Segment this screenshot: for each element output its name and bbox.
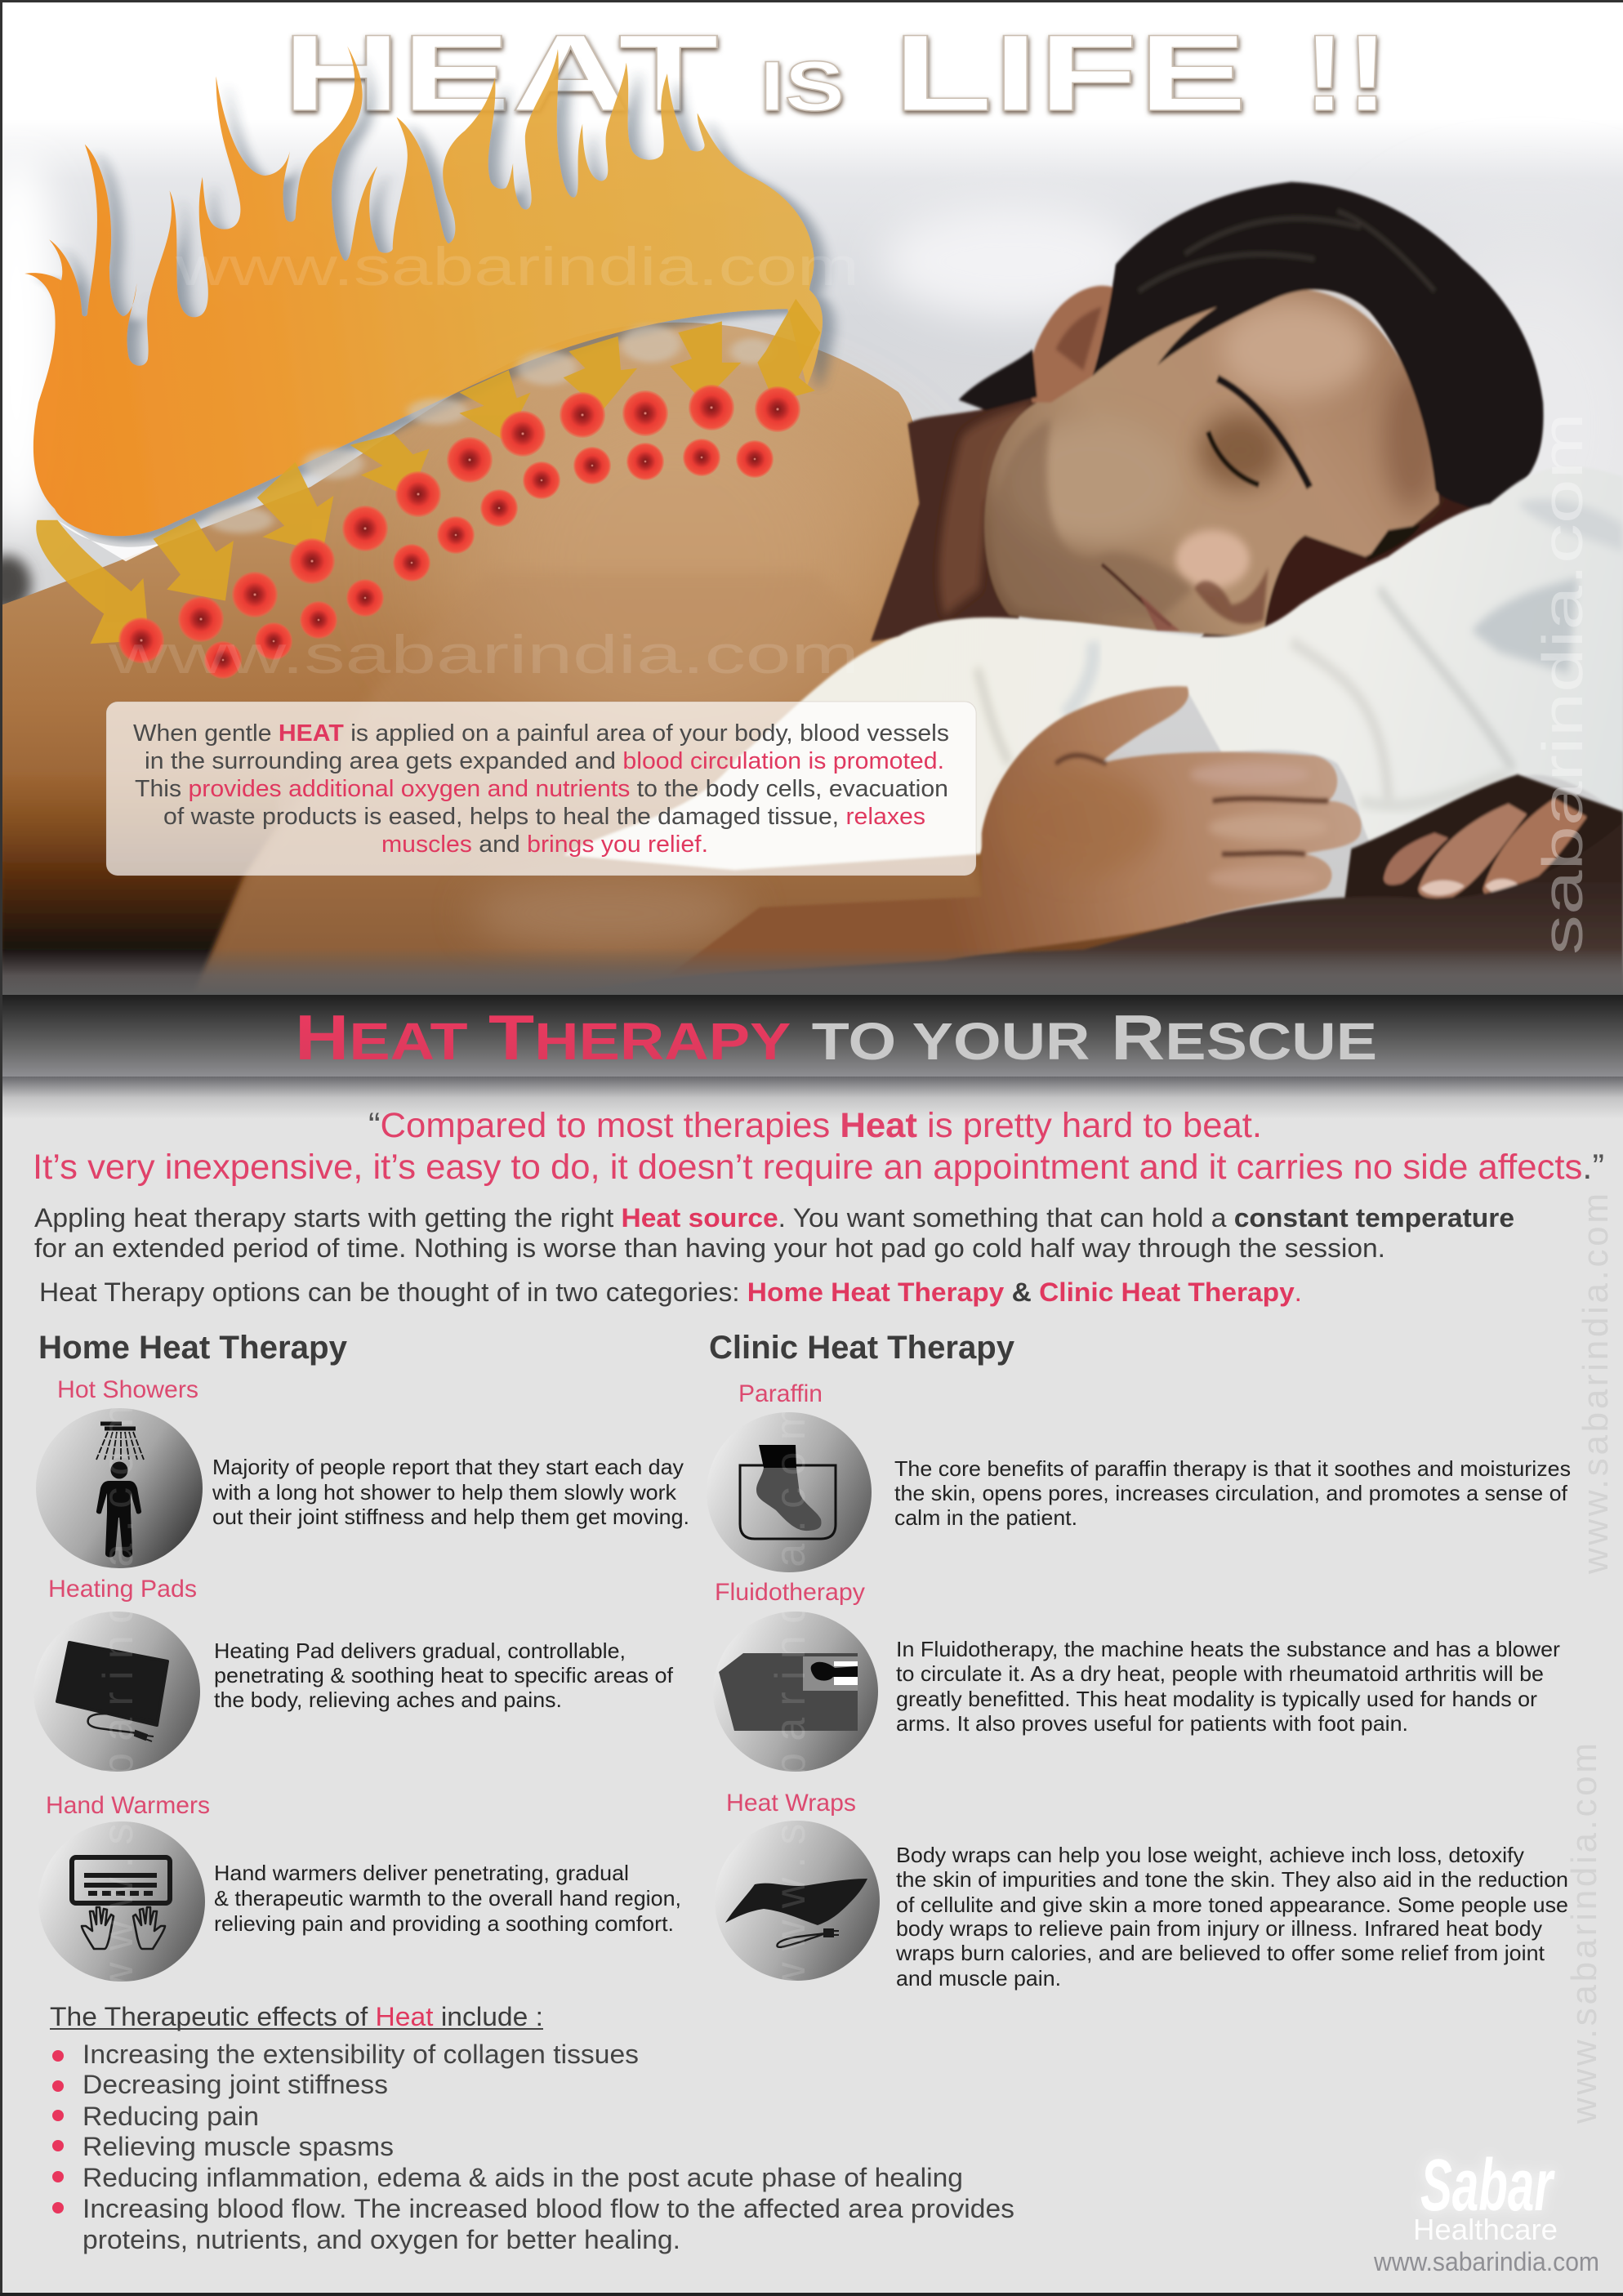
icon: hand warmer xyxy=(38,1821,205,1982)
label: Heat Wraps xyxy=(726,1790,856,1817)
watermark inside icon circles: www.sabarindia.com xyxy=(767,1405,814,1994)
line: the skin of impurities and tone the skin. They also aid in the reduction xyxy=(896,1867,1568,1892)
line: the body, relieving aches and pains. xyxy=(214,1687,562,1712)
banner: dark band xyxy=(0,995,1623,1119)
line: relieving pain and providing a soothing comfort. xyxy=(214,1911,674,1936)
darker left body xyxy=(2,784,263,983)
intro line 2: for an extended period of time. Nothing is worse than having your hot pad go cold half way through the session. xyxy=(34,1233,1385,1263)
line: body wraps to relieve pain from injury or illness. Infrared heat body xyxy=(896,1916,1542,1941)
callout text line 1: When gentle HEAT is applied on a painful area of your body, blood vessels xyxy=(133,720,949,747)
effect 5: Reducing inflammation, edema & aids in the post acute phase of healing xyxy=(82,2163,963,2192)
heading: Clinic Heat Therapy: Clinic Heat Therapy xyxy=(709,1330,1015,1366)
line: & therapeutic warmth to the overall hand region, xyxy=(214,1886,681,1910)
description xyxy=(214,1861,681,1936)
icon: shower and person xyxy=(36,1408,203,1568)
effect 4: Relieving muscle spasms xyxy=(82,2132,394,2161)
label: Hand Warmers xyxy=(46,1792,210,1819)
website: www.sabarindia.com xyxy=(1373,2247,1599,2276)
watermark: right vertical upper: www.sabarindia.com xyxy=(1576,1193,1616,1575)
man's head, hair and neck xyxy=(871,182,1544,647)
blood vessel dots xyxy=(118,385,800,679)
flame and heat arrows xyxy=(25,47,823,644)
line: greatly benefitted. This heat modality is typically used for hands or xyxy=(896,1687,1537,1711)
arm highlight xyxy=(470,876,748,950)
icon: heat wrap xyxy=(715,1821,880,1981)
callout text line 5: muscles and brings you relief. xyxy=(381,831,708,858)
logo subtitle: Healthcare xyxy=(1413,2213,1558,2246)
line: The core benefits of paraffin therapy is that it soothes and moisturizes xyxy=(894,1456,1571,1481)
callout text line 4: of waste products is eased, helps to heal the damaged tissue, relaxes xyxy=(163,804,925,830)
watermark inside icon circles xyxy=(95,1405,814,1994)
title xyxy=(282,13,1389,134)
intro paragraph xyxy=(34,1203,1514,1263)
heat arrows xyxy=(36,299,820,644)
gaps between arrows xyxy=(207,325,774,533)
watermark: upper horizontal: www.sabarindia.com xyxy=(175,236,859,296)
list heading: The Therapeutic effects of Heat include : xyxy=(50,2002,543,2031)
effect 6: Increasing blood flow. The increased blood flow to the affected area provides xyxy=(82,2194,1014,2223)
bullets xyxy=(52,2050,64,2214)
line: wraps burn calories, and are believed to offer some relief from joint xyxy=(895,1941,1545,1965)
line: the skin, opens pores, increases circulation, and promotes a sense of xyxy=(894,1481,1568,1505)
description xyxy=(214,1638,674,1712)
line: of cellulite and give skin a more toned appearance. Some people use xyxy=(896,1893,1568,1917)
heading: Heat Therapy to your Rescue: HEAT THERAPY TO YOUR RESCUE xyxy=(295,1001,1377,1073)
line: and muscle pain. xyxy=(896,1966,1061,1991)
description xyxy=(896,1637,1560,1736)
effect 1: Increasing the extensibility of collagen tissues xyxy=(82,2040,639,2069)
label: Paraffin xyxy=(738,1380,823,1407)
panel: hero photo of sleeping man xyxy=(0,0,1623,1005)
title word LIFE: LIFE xyxy=(893,13,1247,134)
quote line 2: It’s very inexpensive, it’s easy to do, it doesn’t require an appointment and it carries no side affects .” xyxy=(33,1148,1604,1187)
lighter upper arm xyxy=(207,672,1004,972)
bottom fade of photo xyxy=(0,947,1623,995)
callout text line 2: in the surrounding area gets expanded and blood circulation is promoted. xyxy=(145,748,944,774)
white pillow xyxy=(564,466,1623,870)
therapeutic effects list xyxy=(50,2002,1014,2254)
quote line 1: “Compared to most therapies Heat is pretty hard to beat. xyxy=(368,1106,1262,1145)
line: penetrating & soothing heat to specific areas of xyxy=(214,1663,674,1687)
description xyxy=(212,1455,689,1529)
item: Paraffin xyxy=(707,1380,1571,1572)
categories line: Heat Therapy options can be thought of in two categories: Home Heat Therapy & Clinic Heat Therapy . xyxy=(39,1277,1302,1307)
effect 6: proteins, nutrients, and oxygen for better healing. xyxy=(82,2225,680,2254)
icon: foot in paraffin bath xyxy=(707,1412,872,1572)
line: with a long hot shower to help them slowly work xyxy=(212,1480,677,1505)
description xyxy=(894,1456,1571,1530)
logo: Sabar Healthcare xyxy=(1373,2145,1599,2276)
item: Hand Warmers xyxy=(38,1792,681,1982)
white gap under flame xyxy=(57,520,164,561)
item: Heat Wraps xyxy=(715,1790,1568,1991)
title exclamation marks: !! xyxy=(1303,13,1389,134)
intro line 1: Appling heat therapy starts with getting the right Heat source . You want something that can hold a constant temperature xyxy=(34,1203,1514,1233)
effect 2: Decreasing joint stiffness xyxy=(82,2070,388,2099)
line: Body wraps can help you lose weight, achieve inch loss, detoxify xyxy=(896,1843,1524,1867)
watermark inside icon circles: www.sabarindia.com xyxy=(95,1405,142,1994)
man's hand on pillow xyxy=(667,686,1362,976)
title word HEAT: HEAT xyxy=(282,13,719,134)
icon: heating pad xyxy=(33,1612,200,1772)
label: Heating Pads xyxy=(48,1576,197,1603)
heading: Home Heat Therapy: Home Heat Therapy xyxy=(38,1330,348,1366)
effect 6 xyxy=(82,2194,1014,2254)
blanket and far hand xyxy=(722,773,1623,986)
line: calm in the patient. xyxy=(894,1505,1077,1530)
line: Heating Pad delivers gradual, controllable, xyxy=(214,1638,626,1663)
title word IS: IS xyxy=(760,47,845,126)
item: Fluidotherapy xyxy=(713,1579,1560,1772)
callout: heat explanation box xyxy=(106,702,976,876)
icon: fluidotherapy machine xyxy=(713,1612,878,1772)
line: Majority of people report that they start each day xyxy=(212,1455,684,1479)
effect 3: Reducing pain xyxy=(82,2102,259,2131)
line: out their joint stiffness and help them get moving. xyxy=(212,1505,689,1529)
callout text line 3: This provides additional oxygen and nutrients to the body cells, evacuation xyxy=(135,776,948,802)
line: In Fluidotherapy, the machine heats the substance and has a blower xyxy=(896,1637,1560,1661)
watermark: vertical on photo: sabarindia.com xyxy=(1531,412,1594,955)
item: Heating Pads xyxy=(33,1576,674,1772)
description xyxy=(895,1843,1568,1991)
line: Hand warmers deliver penetrating, gradual xyxy=(214,1861,629,1885)
man's back and arm xyxy=(0,323,1242,1005)
item: Hot Showers xyxy=(36,1376,689,1568)
label: Hot Showers xyxy=(57,1376,198,1403)
flame shape xyxy=(25,47,823,536)
logo wordmark: Sabar xyxy=(1420,2145,1555,2227)
line: to circulate it. As a dry heat, people with rheumatoid arthritis will be xyxy=(896,1661,1544,1686)
photo backdrop xyxy=(0,0,1623,995)
watermark: lower horizontal: www.sabarindia.com xyxy=(107,624,859,684)
line: arms. It also proves useful for patients with foot pain. xyxy=(896,1711,1408,1736)
watermark: right vertical lower: www.sabarindia.com xyxy=(1564,1743,1604,2124)
label: Fluidotherapy xyxy=(715,1579,865,1606)
